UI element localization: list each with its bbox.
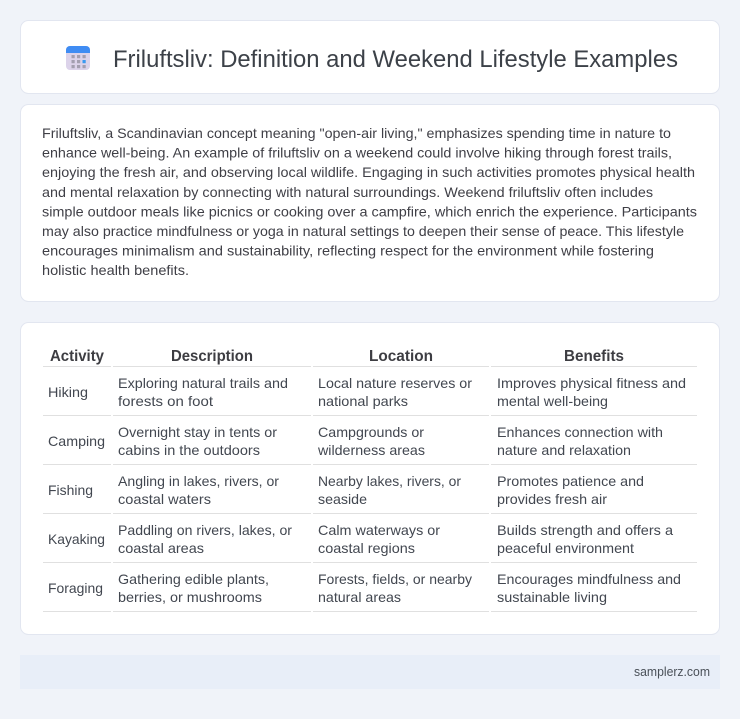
table row: Camping <box>43 424 697 465</box>
panel: definition paragraph <box>20 104 720 302</box>
table row: Foraging: Gathering edible plants, <box>118 571 269 587</box>
table row: Kayaking: coastal regions <box>318 540 415 556</box>
table row: Camping: Camping <box>48 433 105 449</box>
table row: Foraging: berries, or mushrooms <box>118 589 262 605</box>
table row: Hiking: Exploring natural trails and <box>118 375 288 391</box>
icon: calendar <box>66 46 90 70</box>
table row: Foraging: Forests, fields, or nearby <box>318 571 472 587</box>
footer bar <box>20 655 720 689</box>
table row: Kayaking: Calm waterways or <box>318 522 440 538</box>
table row: Fishing: Angling in lakes, rivers, or <box>118 473 279 489</box>
text block: definition: enjoying the fresh air, and observing local wildlife. Engaging in such activities promotes physical health <box>42 164 695 180</box>
table row: Camping: nature and relaxation <box>497 442 631 458</box>
table row: Hiking: forests on foot <box>118 393 213 409</box>
table row: Kayaking: Paddling on rivers, lakes, or <box>118 522 292 538</box>
text block: definition: enhance well-being. An example of friluftsliv on a weekend could involve hiking through forest trails, <box>42 145 672 161</box>
table row: Camping: Enhances connection with <box>497 424 663 440</box>
table row: Fishing: coastal waters <box>118 491 211 507</box>
table row: Fishing: provides fresh air <box>497 491 607 507</box>
table row: Kayaking: coastal areas <box>118 540 204 556</box>
table row: Hiking: Local nature reserves or <box>318 375 472 391</box>
text block: definition: Friluftsliv, a Scandinavian concept meaning "open-air living," emphasizes spending time in nature to <box>42 125 671 141</box>
table row: Foraging: natural areas <box>318 589 401 605</box>
table row: Kayaking: Kayaking <box>48 531 105 547</box>
table header row: Benefits <box>564 348 624 365</box>
text block: definition: and mental relaxation by connecting with natural surroundings. Weekend friluftsliv often includes <box>42 184 653 200</box>
table row: Foraging: Encourages mindfulness and <box>497 571 681 587</box>
text block: definition <box>42 125 697 278</box>
table row: Kayaking <box>43 522 697 563</box>
table row: Fishing: Nearby lakes, rivers, or <box>318 473 461 489</box>
text block: definition: encourages minimalism and sustainability, reflecting respect for the environment while fostering <box>42 243 654 259</box>
table row: Kayaking: Builds strength and offers a <box>497 522 673 538</box>
text block: definition: simple outdoor meals like picnics or cooking over a campfire, which enrich the experience. Participants <box>42 203 697 219</box>
table row: Camping: cabins in the outdoors <box>118 442 260 458</box>
table row: Fishing: Fishing <box>48 482 93 498</box>
table row: Hiking: mental well-being <box>497 393 608 409</box>
text block: definition: holistic health benefits. <box>42 262 189 278</box>
title: Friluftsliv: Definition and Weekend Lifestyle Examples <box>113 46 678 73</box>
panel: activities table <box>20 322 720 634</box>
panel: title header <box>20 20 720 94</box>
table header row: Activity <box>50 348 104 365</box>
table header row <box>43 348 697 367</box>
table row: Fishing: seaside <box>318 491 367 507</box>
table header row: Description <box>171 348 253 365</box>
table row: Camping: Overnight stay in tents or <box>118 424 277 440</box>
table row: Foraging <box>43 571 697 612</box>
table row: Fishing: Promotes patience and <box>497 473 644 489</box>
text block: definition: may also practice mindfulness or yoga in natural settings to deepen their sense of peace. This lifestyle <box>42 223 684 239</box>
table row: Kayaking: peaceful environment <box>497 540 634 556</box>
table row: Hiking <box>43 375 697 416</box>
table row: Foraging: Foraging <box>48 580 103 596</box>
table row: Camping: Campgrounds or <box>318 424 424 440</box>
footer text: samplerz.com <box>634 665 710 679</box>
table row: Hiking: Hiking <box>48 384 88 400</box>
table row: Fishing <box>43 473 697 514</box>
table row: Hiking: national parks <box>318 393 408 409</box>
table row: Foraging: sustainable living <box>497 589 607 605</box>
table row: Hiking: Improves physical fitness and <box>497 375 686 391</box>
table row: Camping: wilderness areas <box>317 442 425 458</box>
table header row: Location <box>369 348 433 365</box>
